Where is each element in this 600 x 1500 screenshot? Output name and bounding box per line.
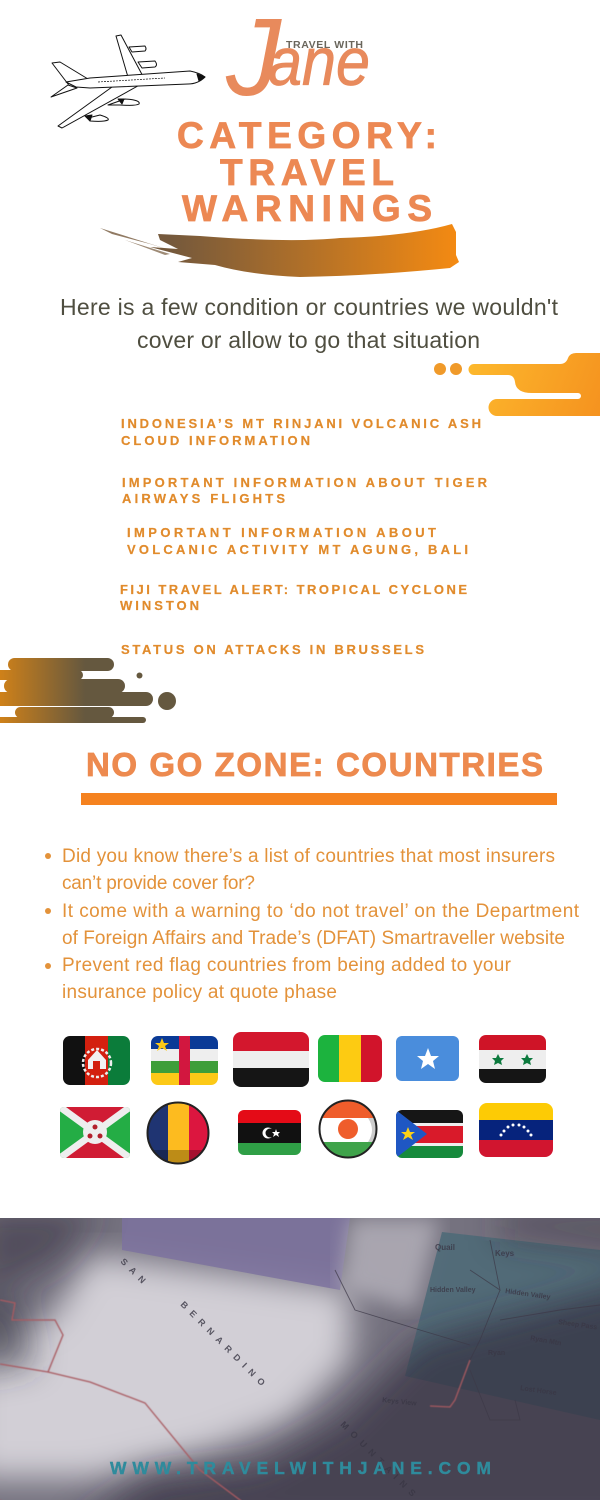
flag: Somalia — [396, 1036, 459, 1081]
map: red roads — [0, 1300, 470, 1500]
map: labels: Keys — [495, 1249, 515, 1258]
bullet list: Did you know there’s a list of countries that most insurers — [62, 846, 555, 867]
flag: Niger — [320, 1100, 376, 1158]
decoration: left speed pills — [0, 658, 176, 723]
title — [177, 115, 437, 229]
icon: airplane — [51, 35, 205, 128]
list: travel warnings: STATUS ON ATTACKS IN BRUSSELS — [121, 642, 424, 657]
brush stroke — [100, 224, 459, 277]
bullet list — [45, 846, 580, 1003]
map: labels: Sheep Pass — [558, 1319, 598, 1331]
heading underline — [81, 793, 557, 805]
flag: Venezuela — [479, 1103, 553, 1157]
list: travel warnings: WINSTON — [120, 598, 199, 613]
flag: Mali — [318, 1035, 382, 1082]
bullet list: It come with a warning to ‘do not travel’ on the Department — [62, 901, 580, 922]
map: bright paper area — [0, 1255, 350, 1478]
intro text — [60, 294, 559, 353]
map: labels: Keys View — [382, 1397, 417, 1408]
list: travel warnings: VOLCANIC ACTIVITY MT AGUNG, BALI — [127, 542, 468, 557]
map: white zone beside purple — [340, 1218, 440, 1310]
map: labels: Ryan Mtn — [530, 1335, 562, 1347]
map: labels: Lost Horse — [520, 1385, 557, 1397]
bullet list: of Foreign Affairs and Trade’s (DFAT) Smartraveller website — [62, 928, 565, 949]
heading: no go zone: NO GO ZONE: COUNTRIES — [86, 746, 543, 783]
logo: Travel with Jane: TRAVEL WITH — [286, 39, 363, 51]
map: labels: Hidden Valley — [430, 1287, 476, 1294]
bullet list: Prevent red flag countries from being added to your — [62, 955, 512, 976]
map: labels — [119, 1243, 598, 1500]
intro text: cover or allow to go that situation — [137, 327, 480, 353]
map: labels: BERNARDINO — [179, 1299, 271, 1392]
map: labels: Ryan — [488, 1350, 505, 1357]
map: dark trails — [334, 1240, 600, 1360]
flag: Central African Republic — [151, 1036, 218, 1085]
list: travel warnings: IMPORTANT INFORMATION ABOUT TIGER — [122, 475, 488, 490]
list: travel warnings: IMPORTANT INFORMATION ABOUT — [127, 525, 436, 540]
map: dark vignettes — [0, 1205, 600, 1500]
map: purple zone — [122, 1218, 350, 1290]
flag: Chad — [148, 1102, 209, 1164]
photo: folded map — [0, 1205, 600, 1500]
map: labels: SAN — [119, 1256, 152, 1290]
flag: Syria — [479, 1035, 546, 1083]
decoration: top right pills — [434, 353, 600, 416]
map: labels: Hidden Valley — [505, 1288, 551, 1301]
list: travel warnings: FIJI TRAVEL ALERT: TROPICAL CYCLONE — [120, 582, 467, 597]
flag: Libya — [238, 1110, 301, 1155]
logo: Travel with Jane — [225, 0, 370, 119]
title: CATEGORY: — [177, 115, 437, 156]
list: travel warnings: INDONESIA’S MT RINJANI VOLCANIC ASH — [121, 416, 481, 431]
flag: Yemen — [233, 1032, 309, 1087]
bullet list: can’t provide cover for? — [62, 873, 255, 894]
map: teal zone — [405, 1232, 600, 1420]
title: WARNINGS — [182, 188, 432, 229]
title: TRAVEL — [220, 152, 394, 193]
flags grid — [60, 1032, 553, 1164]
footer url: WWW.TRAVELWITHJANE.COM — [110, 1458, 491, 1478]
flag: Afghanistan — [63, 1036, 130, 1085]
bullet list: insurance policy at quote phase — [62, 982, 337, 1003]
list: travel warnings: CLOUD INFORMATION — [121, 433, 310, 448]
logo: Travel with Jane: ane — [268, 24, 370, 100]
intro text: Here is a few condition or countries we wouldn't — [60, 294, 559, 320]
list: travel warnings: AIRWAYS FLIGHTS — [122, 491, 285, 506]
map: labels: Quail — [435, 1243, 455, 1252]
list: travel warnings — [120, 416, 488, 657]
flag: South Sudan — [396, 1110, 463, 1158]
flag: Burundi — [60, 1107, 130, 1158]
